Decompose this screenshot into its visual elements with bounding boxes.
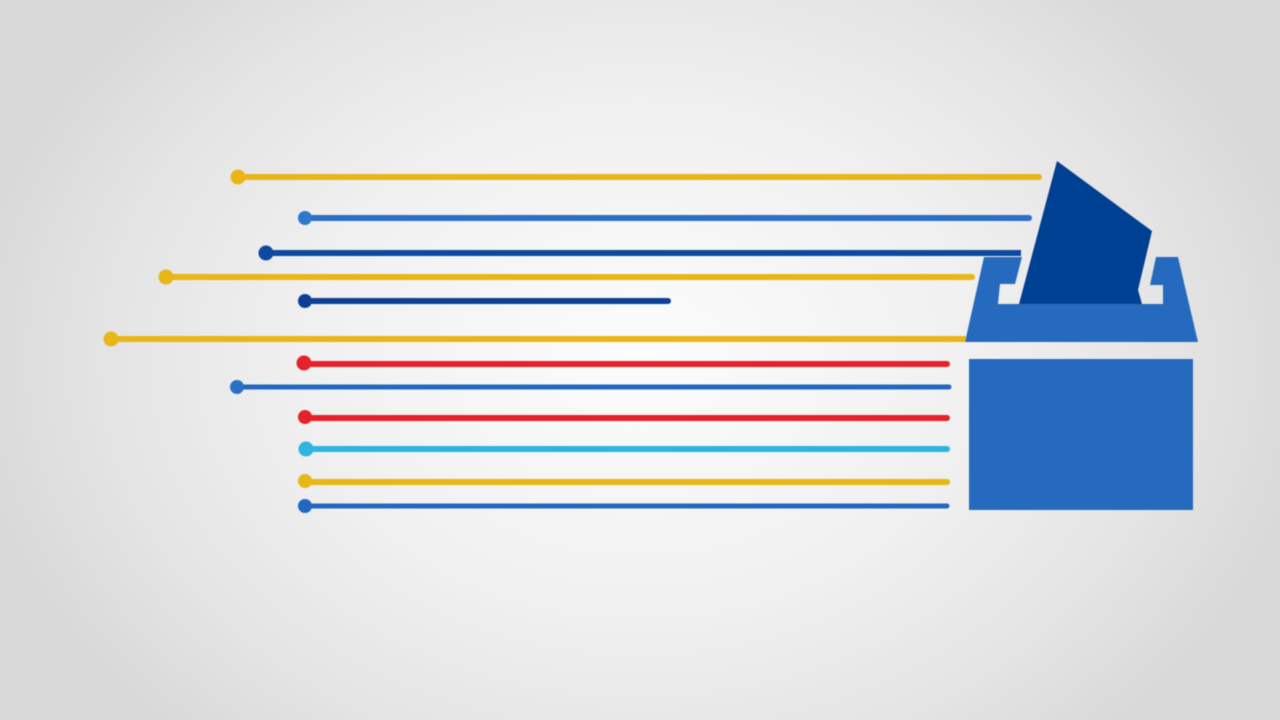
line 5: short navy (298, 294, 668, 308)
line 12: mid blue (298, 499, 947, 513)
line 3: dark blue (258, 246, 1021, 260)
line 2: mid blue (298, 211, 1029, 225)
ballot paper (1019, 161, 1152, 304)
box body (969, 359, 1193, 510)
line 10: cyan (298, 442, 947, 456)
line 9: red (298, 410, 947, 424)
line 6: yellow (104, 332, 966, 346)
line 7: red (296, 356, 947, 370)
line 8: mid blue (230, 380, 949, 394)
line 4: yellow (158, 270, 972, 284)
box lid (965, 257, 1198, 342)
line 11: yellow (298, 474, 947, 488)
icon: ballot box (965, 161, 1198, 510)
line 1: yellow (230, 170, 1039, 184)
